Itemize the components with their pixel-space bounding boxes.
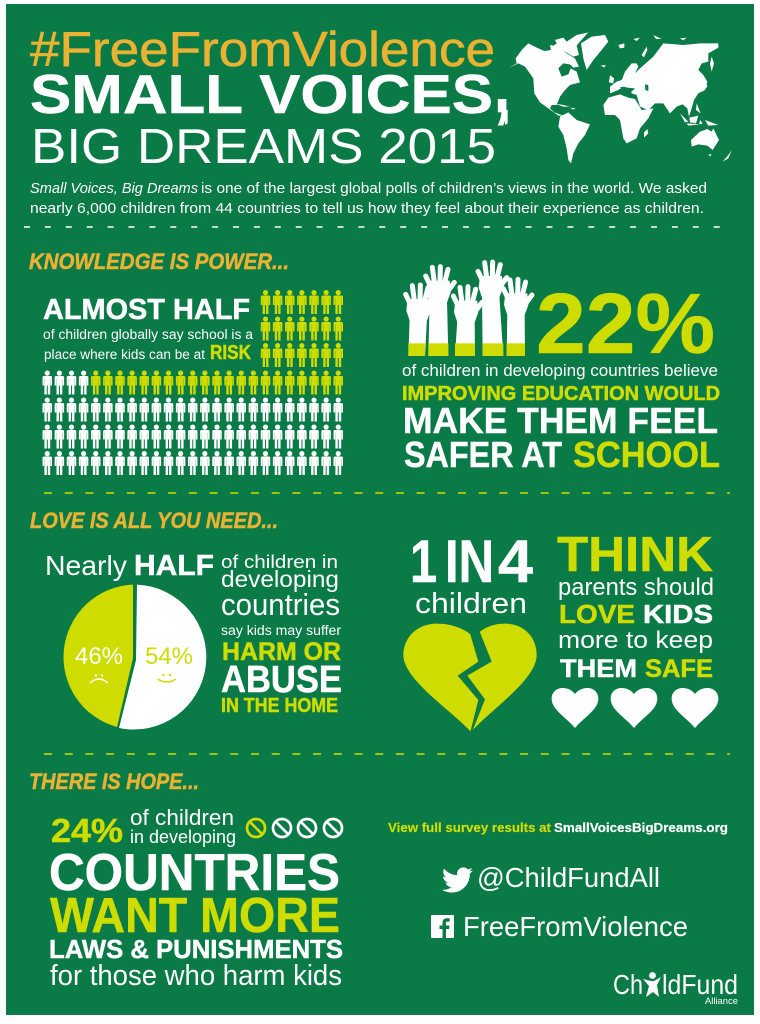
header	[30, 23, 732, 217]
nearly: Nearly	[45, 550, 127, 581]
one in four figure: 4	[498, 528, 534, 595]
survey link text: SmallVoicesBigDreams.org	[554, 820, 728, 835]
one in four figure	[410, 528, 534, 595]
in developing: in developing	[130, 826, 236, 847]
pie chart: 54%	[145, 643, 193, 670]
title: small voices: ,	[494, 36, 510, 131]
section heading: there is hope: THERE IS HOPE...	[29, 769, 199, 794]
kids: KIDS	[643, 599, 713, 629]
children label: children	[415, 588, 527, 620]
for those who harm kids: for those who harm kids	[50, 960, 342, 992]
laws and punishments: LAWS & PUNISHMENTS	[49, 934, 343, 964]
love: LOVE	[559, 599, 635, 629]
pie chart: 46%	[75, 643, 123, 670]
panel: nearly half	[45, 550, 342, 730]
more to keep: more to keep	[558, 627, 713, 654]
half: HALF	[134, 550, 214, 582]
icon: twitter bird	[442, 867, 473, 893]
risk word: RISK	[210, 342, 251, 364]
intro paragraph: Small Voices, Big Dreams	[30, 181, 198, 197]
world map	[505, 32, 732, 163]
logo: childfund alliance	[613, 969, 738, 1007]
22 percent figure: 22%	[536, 277, 715, 372]
intro paragraph: nearly 6,000 children from 44 countries to tell us how they feel about their experience as children.	[30, 201, 704, 217]
them: THEM	[560, 655, 637, 683]
countries: countries	[221, 587, 340, 622]
icons: prohibition signs	[247, 819, 342, 837]
intro paragraph	[30, 181, 707, 217]
hashtag title: #FreeFromViolence	[30, 23, 495, 77]
panel: 24 percent	[49, 805, 343, 992]
logo: childfund alliance: ldFund	[662, 969, 738, 1000]
section heading: love is all you need: LOVE IS ALL YOU NEED...	[30, 508, 278, 533]
make them feel: MAKE THEM FEEL	[403, 400, 718, 441]
intro paragraph: is one of the largest global polls of children’s views in the world. We asked	[201, 181, 707, 197]
panel: 22 percent	[402, 262, 720, 475]
in the home: IN THE HOME	[221, 695, 338, 717]
icons: three hearts	[552, 688, 718, 728]
parents should: parents should	[558, 574, 714, 601]
of children in: of children in	[221, 551, 338, 572]
almost half body line 1: of children globally say school is a	[43, 327, 254, 342]
title: small voices: SMALL VOICES	[30, 63, 493, 125]
twitter handle: @ChildFundAll	[477, 862, 660, 893]
panel: follow and links	[388, 820, 738, 1007]
school: SCHOOL	[573, 434, 720, 475]
one in four figure: IN	[445, 528, 494, 595]
almost half body line 2: place where kids can be at	[44, 347, 205, 362]
pie chart	[64, 585, 206, 730]
safer at: SAFER AT	[404, 434, 562, 475]
one in four figure: 1	[410, 528, 437, 595]
want more: WANT MORE	[50, 889, 340, 943]
say kids may suffer: say kids may suffer	[221, 623, 342, 638]
developing: developing	[221, 566, 339, 592]
almost half heading: ALMOST HALF	[43, 294, 250, 326]
seas cut out of the map	[619, 73, 648, 92]
logo: childfund alliance: Alliance	[705, 996, 738, 1007]
countries: COUNTRIES	[49, 844, 340, 902]
icon: broken heart	[403, 624, 537, 733]
icon: raised hands	[406, 262, 532, 356]
survey link text: View full survey results at	[388, 820, 552, 835]
abuse: ABUSE	[221, 659, 342, 701]
title: small voices	[30, 36, 510, 131]
panel: 1 in 4	[403, 528, 718, 733]
22 percent caption: of children in developing countries believe	[402, 361, 718, 380]
survey link text	[388, 820, 728, 835]
24 percent: 24%	[51, 812, 123, 849]
facebook handle: FreeFromViolence	[463, 911, 688, 942]
harm or: HARM OR	[222, 638, 341, 666]
of children: of children	[130, 805, 234, 830]
improving education: IMPROVING EDUCATION WOULD	[402, 383, 720, 405]
title: big dreams: BIG DREAMS 2015	[31, 120, 496, 174]
icon: facebook	[431, 915, 454, 938]
pictogram of children	[42, 290, 343, 475]
logo: childfund alliance: Ch	[613, 969, 643, 1000]
safe: SAFE	[645, 655, 713, 683]
think: THINK	[557, 528, 713, 582]
section heading: knowledge is power: KNOWLEDGE IS POWER...	[29, 249, 289, 274]
panel: almost half	[42, 290, 343, 475]
